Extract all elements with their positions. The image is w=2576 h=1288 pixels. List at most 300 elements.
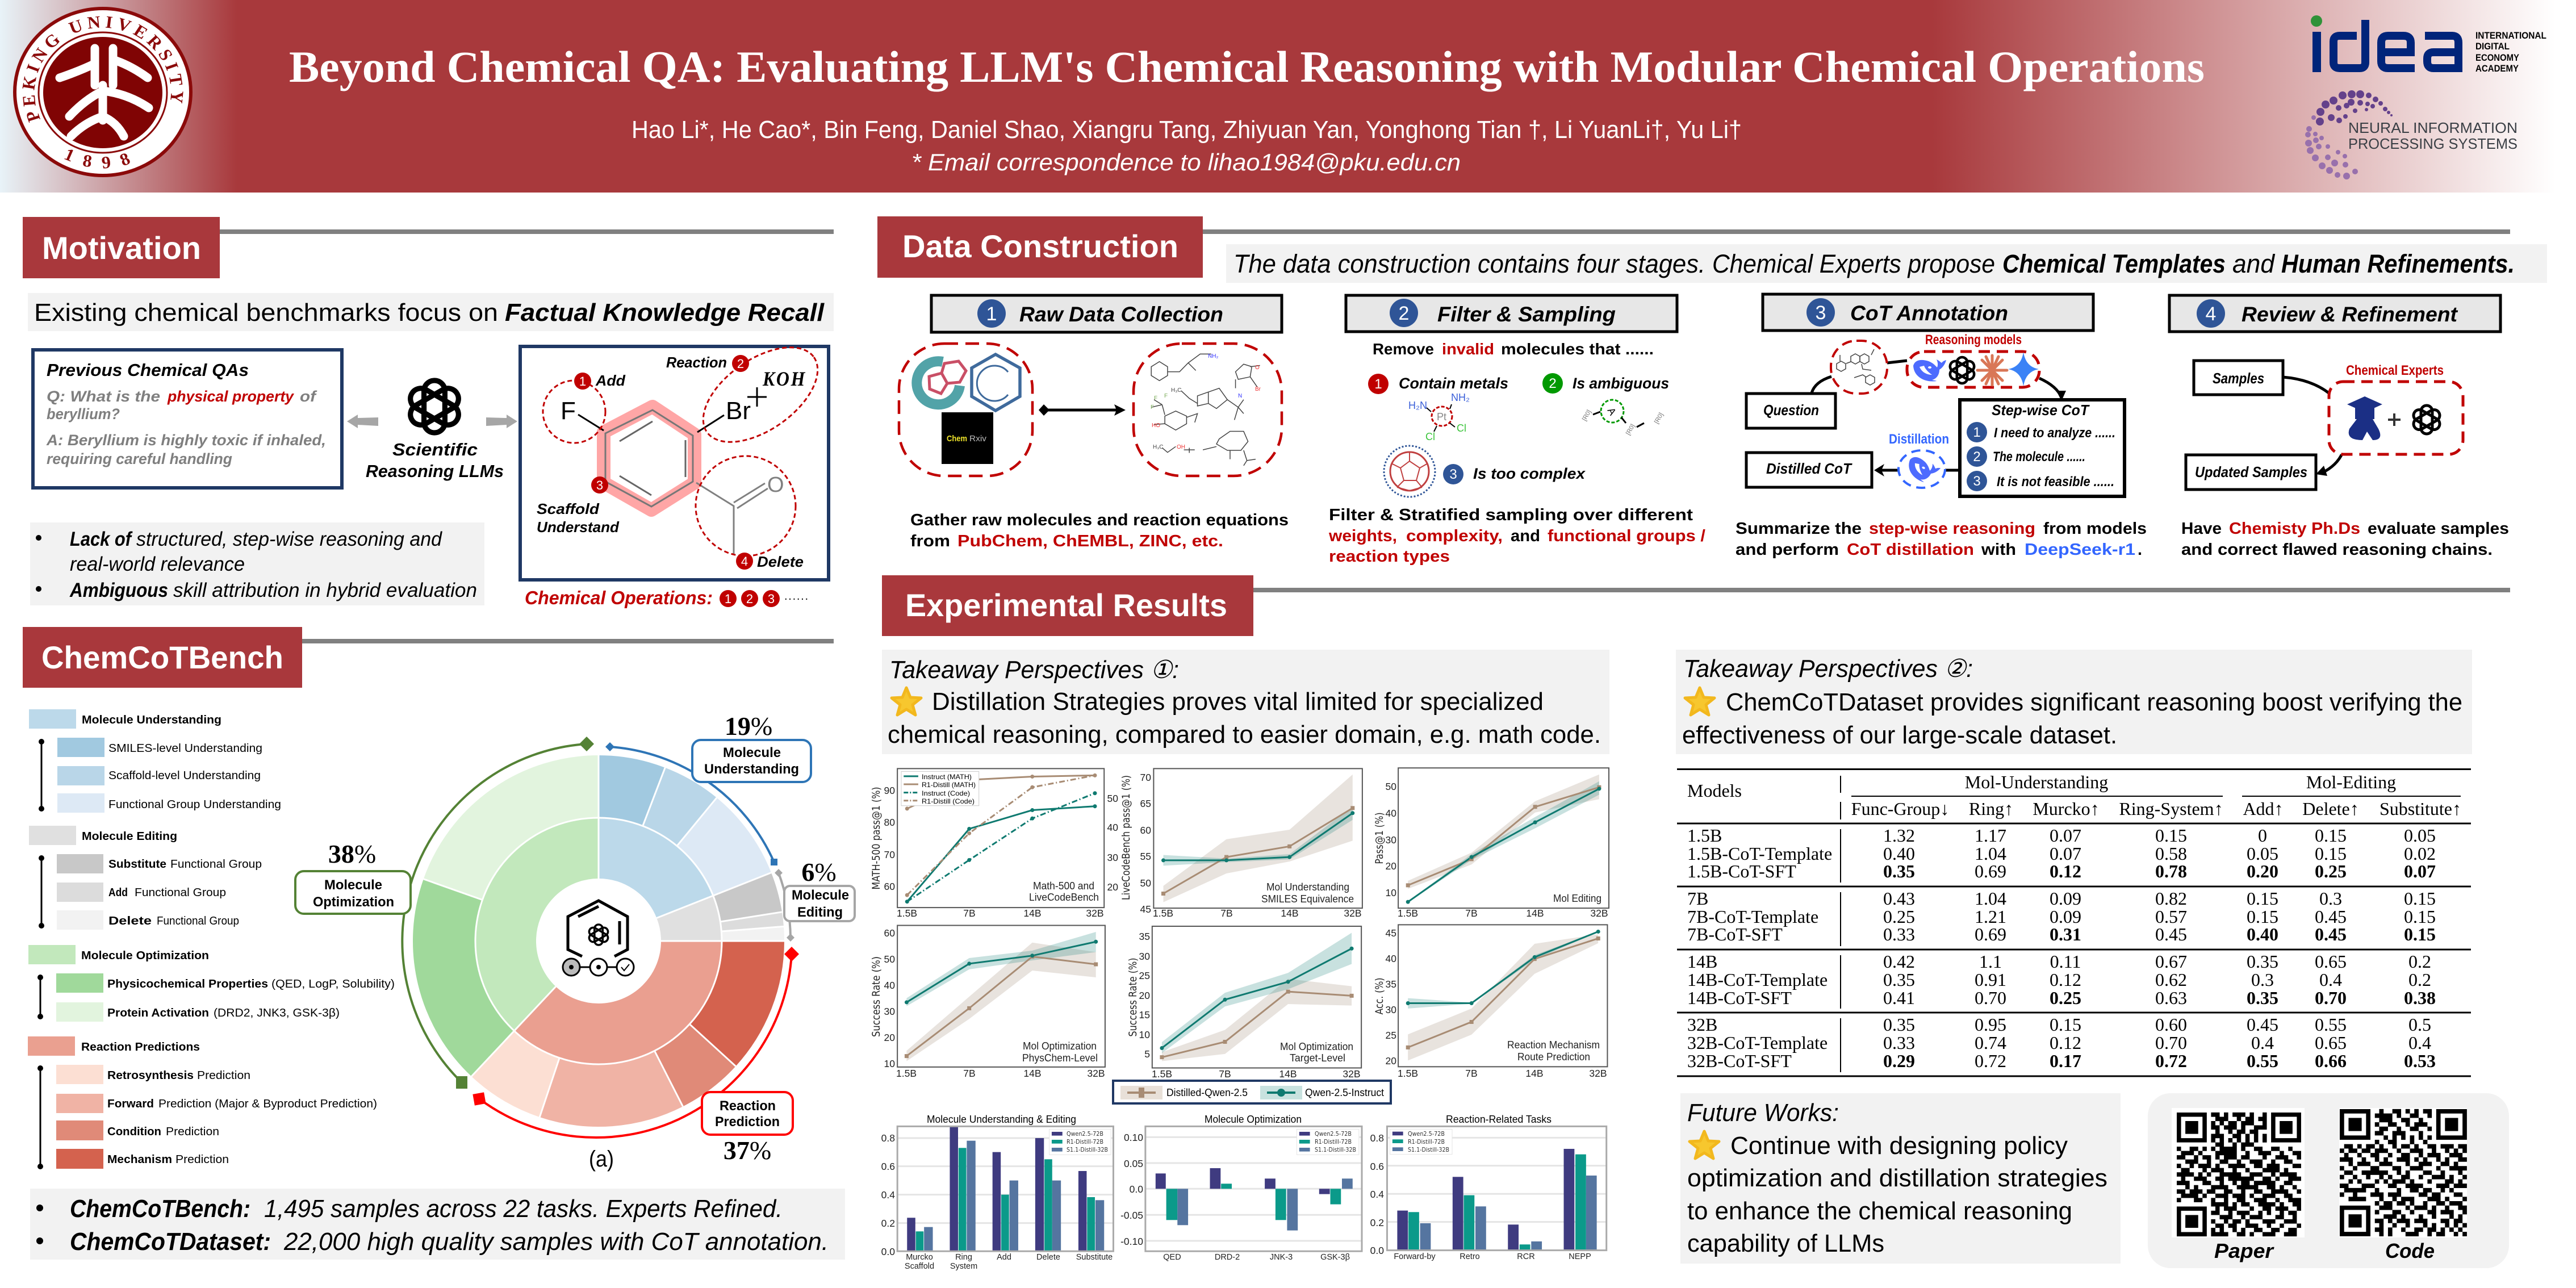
stage 3 heading: 3	[1816, 302, 1826, 324]
logo: NeurIPS: NEURAL INFORMATION	[2348, 119, 2518, 136]
chemical operations caption: 1	[725, 592, 731, 606]
box: chemical operations molecule	[520, 328, 834, 580]
description bar	[1226, 244, 2547, 283]
chart: Mol Optimization PhysChem-Level: 1.5B	[896, 1068, 917, 1079]
heading: ChemCoTBench	[23, 627, 302, 688]
bar chart: Molecule Optimization: 0.0	[1130, 1184, 1143, 1195]
table: model results: 0.70	[2155, 1032, 2187, 1053]
legend: task taxonomy: Prediction	[197, 1069, 250, 1082]
label: Molecule Understanding 19%: Understanding	[704, 762, 799, 777]
label: Molecule Editing 6%: 6%	[801, 858, 837, 886]
chart: Mol Optimization PhysChem-Level: 20	[884, 1032, 895, 1043]
description bar: and	[2232, 249, 2276, 278]
bar chart: Reaction-Related Tasks	[1370, 1114, 1607, 1261]
table: model results: 0.45	[2315, 906, 2347, 927]
stage 2 description: reaction types	[1329, 547, 1450, 566]
box: samples	[2194, 361, 2283, 395]
box: samples: Samples	[2213, 370, 2264, 387]
chart: Mol Understanding SMILES Equivalence: 45	[1140, 904, 1151, 915]
table: model results: 0.25	[2315, 861, 2347, 881]
chemical operations caption: 3	[768, 592, 775, 606]
table: model results: 0.15	[2050, 1014, 2081, 1035]
legend: task taxonomy: (QED, LogP, Solubility)	[271, 977, 395, 990]
table: model results: 0.29	[1883, 1051, 1915, 1071]
chart: Math-500 and LiveCodeBench: 20	[1107, 881, 1118, 893]
header banner	[0, 0, 2546, 193]
stage 1 description	[910, 511, 1289, 550]
table: model results: 0.43	[1883, 888, 1915, 909]
label: Molecule Optimization 38%: Optimization	[313, 894, 394, 910]
stage 3 description: and perform	[1736, 541, 1839, 559]
stage 2 description: complexity,	[1406, 527, 1503, 545]
table: model results: 0.15	[2247, 906, 2278, 927]
icon: center hexagon robot	[563, 901, 634, 976]
chemical experts group: Chemical Experts	[2346, 363, 2444, 378]
chart: Math-500 and LiveCodeBench: Math-500 and	[1033, 880, 1094, 892]
arrow: double headed	[1039, 404, 1126, 416]
chart: Mol Optimization PhysChem-Level: Success Rate (%)	[870, 956, 883, 1037]
chart: Mol Understanding SMILES Equivalence: 65	[1140, 798, 1151, 809]
bar chart: Molecule Optimization	[1120, 1114, 1362, 1262]
invalid criteria: Is too complex	[1473, 465, 1586, 482]
statement bar: Factual Knowledge Recall	[505, 299, 825, 327]
bar chart: Reaction-Related Tasks: 0.4	[1370, 1189, 1384, 1200]
invalid criteria	[1368, 340, 1669, 484]
molecule: platinum complex: Cl	[1457, 423, 1466, 434]
bar chart: Reaction-Related Tasks: 0.2	[1370, 1217, 1384, 1228]
logo: idea: INTERNATIONAL	[2475, 30, 2546, 41]
logo: Peking University seal: PEKING UNIVERSITY	[22, 16, 183, 123]
box: chemical operations molecule: 4	[741, 554, 748, 568]
table: model results: 0.45	[2247, 1014, 2278, 1035]
molecules examples: H₃C	[1153, 444, 1164, 450]
box: previous chemical QAs: requiring careful handling	[47, 450, 232, 467]
legend: task taxonomy: Molecule Understanding	[82, 713, 221, 726]
molecule: platinum complex: Pt	[1437, 411, 1446, 423]
stage 3 heading	[1763, 294, 2093, 331]
table: model results: 0.63	[2155, 988, 2187, 1008]
molecules examples: H₃C	[1171, 387, 1182, 394]
chart: Mol Optimization Target-Level: 30	[1139, 951, 1150, 962]
chart: Math-500 and LiveCodeBench: 1.5B	[897, 908, 917, 919]
table: model results: 0.4	[2408, 1032, 2431, 1053]
table: model results: 0.78	[2155, 861, 2187, 881]
chart: Mol Optimization Target-Level: 14B	[1279, 1068, 1297, 1080]
molecules examples: F	[1151, 404, 1154, 411]
legend: task taxonomy: Protein Activation	[107, 1006, 209, 1019]
chart: Mol Understanding SMILES Equivalence: 7B	[1220, 908, 1233, 919]
table: model results: 0.11	[2050, 951, 2081, 972]
box: step-wise CoT: It is not feasible ......	[1997, 474, 2114, 490]
stage 2 description	[1328, 506, 1705, 566]
chart: Mol Editing: 7B	[1465, 908, 1478, 919]
chart: Math-500 and LiveCodeBench: 32B	[1086, 908, 1104, 919]
icon: reasoning LLM knot with arrows: Scientific	[392, 440, 478, 459]
statement bar	[28, 293, 834, 331]
table: model results: 0.31	[2050, 924, 2081, 944]
legend: task taxonomy	[28, 709, 395, 1169]
bar chart: Molecule Optimization: QED	[1163, 1253, 1181, 1262]
invalid criteria: 3	[1449, 467, 1457, 482]
bullet list: limitations: Ambiguous	[69, 579, 168, 601]
chart: Reaction Mechanism Route Prediction: 25	[1386, 1030, 1396, 1041]
table: model results: 0.38	[2404, 988, 2436, 1008]
chart: Math-500 and LiveCodeBench: Instruct (Code)	[922, 789, 970, 797]
legend: task taxonomy: Prediction	[175, 1153, 229, 1166]
chart: Math-500 and LiveCodeBench: Instruct (MATH)	[922, 773, 972, 781]
legend: task taxonomy: Functional Group	[170, 858, 262, 871]
table: model results: 0.15	[2315, 825, 2347, 846]
table: model results: 14B-CoT-SFT	[1687, 988, 1792, 1008]
chart: Mol Optimization Target-Level: Success Rate (%)	[1127, 957, 1139, 1037]
database logos: Chem	[947, 434, 967, 444]
box: previous chemical QAs: physical property	[167, 388, 295, 405]
chart: Reaction Mechanism Route Prediction: 32B	[1589, 1068, 1607, 1079]
table: model results: 0.17	[2050, 1051, 2081, 1071]
box: chemical operations molecule: F	[561, 397, 576, 425]
chart: Reaction Mechanism Route Prediction: 1.5B	[1398, 1068, 1418, 1079]
box: updated samples: Updated Samples	[2195, 463, 2307, 480]
molecules examples	[1134, 344, 1282, 476]
bullet list: limitations	[30, 522, 484, 605]
stage 3 heading: CoT Annotation	[1850, 302, 2008, 325]
table: model results: 32B-CoT-SFT	[1687, 1051, 1792, 1071]
chart: Mol Editing: Mol Editing	[1553, 893, 1601, 904]
box: question: Question	[1763, 402, 1819, 419]
bar chart: Molecule Optimization: JNK-3	[1270, 1253, 1293, 1262]
bar chart: Molecule Optimization: -0.10	[1120, 1236, 1143, 1247]
table: model results: 0.15	[2155, 825, 2187, 846]
legend: task taxonomy: Functional Group	[135, 886, 226, 899]
chart: Mol Optimization PhysChem-Level	[870, 925, 1105, 1079]
chart: Mol Optimization PhysChem-Level: PhysChem-Level	[1022, 1052, 1098, 1064]
chart: Mol Editing: Pass@1 (%)	[1373, 812, 1386, 864]
chart: Math-500 and LiveCodeBench: R1-Distill (MATH)	[922, 781, 976, 789]
stage 4 description	[2181, 520, 2509, 559]
table: model results: 0.65	[2315, 1032, 2347, 1053]
chart: Mol Optimization Target-Level: Mol Optimization	[1280, 1041, 1353, 1052]
table: model results: 14B	[1687, 951, 1717, 972]
statement bar: Existing chemical benchmarks focus on	[34, 299, 498, 327]
table: model results: 7B	[1687, 888, 1708, 909]
QR code: paper: Paper	[2214, 1239, 2274, 1262]
chart: Math-500 and LiveCodeBench: 90	[884, 785, 895, 796]
table: model results: 1.5B-CoT-Template	[1687, 843, 1832, 864]
bar chart: Molecule Understanding and Editing: Delete	[1036, 1253, 1060, 1262]
chart: Math-500 and LiveCodeBench	[870, 768, 1118, 919]
chart: Mol Understanding SMILES Equivalence: 14B	[1281, 908, 1299, 919]
bar chart: Molecule Understanding and Editing: 0.4	[881, 1189, 895, 1201]
box: chemical operations molecule: Delete	[757, 553, 804, 570]
takeaway 2: Takeaway Perspectives ②:	[1683, 655, 1973, 683]
table: model results: 0.09	[2050, 906, 2081, 927]
table: model results: 0.15	[2404, 888, 2436, 909]
box: step-wise CoT: 2	[1973, 449, 1981, 465]
chart: Mol Editing: 32B	[1590, 908, 1608, 919]
description bar: The data construction contains four stages.	[1233, 249, 1705, 278]
box: previous chemical QAs: Q: What is the	[47, 388, 160, 405]
stage 2 description: Filter & Stratified sampling over different	[1329, 506, 1693, 524]
table: model results: 0.65	[2315, 951, 2347, 972]
bar chart: Molecule Understanding and Editing: 0.8	[881, 1132, 895, 1144]
chart: Mol Optimization Target-Level: 20	[1139, 990, 1150, 1001]
table: model results: 1.5B	[1687, 825, 1722, 846]
molecule: platinum complex: NH₂	[1451, 392, 1470, 403]
logo: idea: ECONOMY	[2475, 52, 2520, 63]
bar chart: Molecule Optimization: -0.05	[1120, 1210, 1143, 1221]
stage 3 description: DeepSeek-r1	[2025, 541, 2135, 559]
reasoning models group	[1907, 332, 2039, 387]
molecule: platinum complex: Cl	[1425, 431, 1435, 442]
takeaway 1: Distillation Strategies proves vital limited for specialized	[932, 688, 1544, 716]
chart: Mol Understanding SMILES Equivalence: Mol Understanding	[1266, 881, 1349, 893]
QR code: paper	[2172, 1108, 2305, 1262]
bullet list: dataset stats: 22,000 high quality samples with CoT annotation.	[283, 1228, 829, 1256]
bullet list: dataset stats: ChemCoTBench:	[70, 1195, 250, 1223]
table: model results: 0.35	[1883, 969, 1915, 990]
table: model results: Substitute↑	[2380, 798, 2461, 819]
stage 2 heading: Filter & Sampling	[1437, 303, 1616, 326]
chemical operations caption: 2	[746, 592, 753, 606]
molecules examples: O	[1255, 365, 1260, 371]
heading: Data Construction	[877, 216, 1203, 278]
authors: Hao Li*, He Cao*, Bin Feng, Daniel Shao, Xiangru Tang, Zhiyuan Yan, Yonghong Tian †, Li YuanLi†, Yu Li†	[632, 116, 1742, 144]
chart: Mol Optimization PhysChem-Level: 60	[884, 927, 895, 939]
stage 4 description: Have	[2181, 520, 2222, 538]
box: step-wise CoT: I need to analyze ......	[1994, 425, 2115, 441]
icon: reasoning LLM knot with arrows	[347, 380, 517, 481]
table: model results: 0.07	[2050, 825, 2081, 846]
table: model results: 1.32	[1883, 825, 1915, 846]
bar chart: Molecule Optimization: 0.10	[1124, 1132, 1143, 1143]
table: model results: 0.2	[2408, 951, 2431, 972]
chart: Math-500 and LiveCodeBench: 7B	[963, 908, 976, 919]
stage 3 description: with	[1981, 541, 2016, 559]
table: model results: 0.53	[2404, 1051, 2436, 1071]
chart: Mol Understanding SMILES Equivalence: LiveCodeBench pass@1 (%)	[1120, 775, 1132, 900]
molecule: ambiguous R groups: [R0]	[1581, 409, 1593, 422]
table: model results: 0.33	[1883, 924, 1915, 944]
bar chart: Reaction-Related Tasks: Retro	[1460, 1252, 1480, 1261]
molecule: ambiguous R groups: [R0]	[1625, 423, 1637, 436]
bar chart: Molecule Understanding and Editing: Qwen2.5-72B	[1067, 1130, 1103, 1138]
bar chart: Molecule Understanding and Editing: R1-Distill-72B	[1067, 1138, 1103, 1145]
bar chart: Molecule Understanding and Editing: 0.0	[881, 1246, 895, 1257]
chart: Mol Optimization Target-Level: 7B	[1219, 1068, 1231, 1080]
legend: task taxonomy: SMILES-level Understanding	[108, 742, 262, 755]
table: model results: 0	[2258, 825, 2267, 846]
stage 2 heading	[1346, 295, 1677, 332]
chart: Mol Optimization PhysChem-Level: 10	[884, 1058, 895, 1069]
box: previous chemical QAs: A: Beryllium is highly toxic if inhaled,	[46, 432, 326, 449]
bar chart: Molecule Understanding and Editing: System	[950, 1262, 977, 1271]
bullet list: limitations: real-world relevance	[70, 553, 245, 575]
distillation icon	[1889, 432, 1949, 488]
table: model results: 7B-CoT-Template	[1687, 906, 1818, 927]
legend: task taxonomy: Retrosynthesis	[107, 1069, 194, 1082]
legend: task taxonomy: Reaction Predictions	[81, 1040, 200, 1053]
connectors	[2283, 377, 2343, 476]
description bar: Human Refinements.	[2281, 249, 2515, 278]
stage 1 description: from	[910, 532, 950, 550]
chart: Reaction Mechanism Route Prediction: Route Prediction	[1517, 1051, 1590, 1063]
bullet list: dataset stats: ChemCoTDataset:	[70, 1228, 271, 1256]
legend: task taxonomy: Functional Group Understanding	[108, 798, 281, 811]
panel: data construction	[877, 216, 2547, 566]
heading: Motivation: Motivation	[42, 230, 201, 266]
table: model results: 0.07	[2050, 843, 2081, 864]
takeaway 1	[882, 650, 1609, 754]
distillation icon: Distillation	[1889, 432, 1949, 447]
future works: capability of LLMs	[1687, 1230, 1884, 1257]
box: chemical operations molecule: 1	[579, 374, 586, 388]
takeaway 1: Takeaway Perspectives ①:	[889, 656, 1179, 684]
invalid criteria: Remove	[1373, 340, 1434, 358]
molecule: ambiguous R groups: A	[1605, 405, 1619, 417]
chart: Mol Optimization PhysChem-Level: 7B	[963, 1068, 976, 1079]
legend: task taxonomy: Molecule Editing	[82, 830, 177, 843]
logo: idea: ACADEMY	[2475, 63, 2519, 74]
table: model results: 0.60	[2155, 1014, 2187, 1035]
logo: idea	[2311, 15, 2546, 74]
label: Molecule Understanding 19%: 19%	[725, 712, 772, 741]
chart: Mol Editing	[1373, 768, 1609, 919]
table: model results: 0.35	[1883, 1014, 1915, 1035]
label: Molecule Optimization 38%: 38%	[328, 839, 376, 868]
chart: Reaction Mechanism Route Prediction: 40	[1386, 953, 1396, 964]
table: model results: 1.17	[1975, 825, 2006, 846]
bar chart: Reaction-Related Tasks: Forward-by	[1394, 1252, 1436, 1261]
takeaway 2: ChemCoTDataset provides significant reasoning boost verifying the	[1726, 688, 2462, 716]
takeaway 2: effectiveness of our large-scale dataset.	[1682, 721, 2117, 749]
stage 4 description: and correct flawed reasoning chains.	[2181, 541, 2493, 559]
molecules examples: HO	[1152, 423, 1160, 429]
legend: task taxonomy: Add	[108, 886, 128, 899]
stage 2 heading: 2	[1399, 303, 1409, 324]
legend: task taxonomy: Substitute	[108, 858, 166, 871]
chart: Reaction Mechanism Route Prediction: Reaction Mechanism	[1507, 1039, 1600, 1051]
chart: Math-500 and LiveCodeBench: 80	[884, 817, 895, 828]
bar chart: Reaction-Related Tasks: 0.0	[1370, 1245, 1384, 1256]
chart: Reaction Mechanism Route Prediction: 35	[1386, 978, 1396, 990]
future works: Continue with designing policy	[1730, 1132, 2068, 1160]
chart: Mol Optimization Target-Level	[1127, 926, 1361, 1080]
box: step-wise CoT: 1	[1973, 425, 1981, 440]
chemical operations caption: Chemical Operations:	[525, 587, 713, 608]
table: model results: 0.45	[2315, 924, 2347, 944]
chemical operations caption: ......	[784, 590, 808, 603]
legend: task taxonomy: Mechanism	[107, 1153, 172, 1166]
table: model results: Mol-Understanding	[1965, 772, 2108, 792]
chart: sunburst donut of task distribution	[295, 712, 855, 1172]
caption (a): (a)	[589, 1147, 614, 1172]
logo: NeurIPS	[2305, 90, 2518, 179]
chemical operations caption	[525, 587, 808, 608]
molecules examples: N	[1238, 393, 1242, 399]
box: chemical operations molecule: 3	[596, 478, 603, 492]
chart: Mol Editing: 30	[1386, 834, 1396, 846]
label: Reaction Prediction 37%: 37%	[724, 1136, 771, 1165]
chart: Math-500 and LiveCodeBench: R1-Distill (Code)	[922, 797, 975, 805]
stage 4 heading: Review & Refinement	[2242, 303, 2458, 326]
chart: Mol Optimization PhysChem-Level: 50	[884, 954, 895, 965]
table: model results: 0.12	[2050, 969, 2081, 990]
table: model results: 32B-CoT-Template	[1687, 1032, 1828, 1053]
table: model results: 0.05	[2247, 843, 2278, 864]
legend: task taxonomy: Prediction	[166, 1125, 219, 1138]
table: model results	[1677, 769, 2471, 1076]
heading: Experimental Results	[882, 575, 1253, 636]
stage 3 description: Summarize the	[1736, 520, 1862, 538]
chart: Mol Understanding SMILES Equivalence: 70	[1140, 772, 1151, 783]
box: previous chemical QAs: Previous Chemical QAs	[47, 360, 249, 380]
table: model results: 0.15	[2315, 843, 2347, 864]
bar chart: Reaction-Related Tasks: Qwen2.5-72B	[1408, 1130, 1445, 1138]
table: model results: 0.35	[2247, 988, 2278, 1008]
table: model results: 0.12	[2050, 1032, 2081, 1053]
heading: Motivation	[23, 217, 220, 278]
table: model results: 0.3	[2319, 888, 2342, 909]
table: model results: 0.91	[1975, 969, 2006, 990]
stage 1 heading	[931, 295, 1282, 332]
table: model results: 1.21	[1975, 906, 2006, 927]
table: model results: 0.15	[2404, 906, 2436, 927]
legend: task taxonomy: Scaffold-level Understanding	[108, 769, 261, 782]
box: step-wise CoT	[1960, 400, 2125, 496]
molecules examples: F	[1164, 393, 1168, 399]
table: model results: 0.35	[1883, 861, 1915, 881]
box: chemical operations molecule: Scaffold	[537, 500, 600, 517]
email: * Email correspondence to lihao1984@pku.edu.cn	[911, 149, 1461, 175]
chart: Mol Optimization Target-Level: 15	[1139, 1009, 1150, 1021]
chart: Math-500 and LiveCodeBench: 50	[1107, 793, 1118, 804]
table: model results: 0.33	[1883, 1032, 1915, 1053]
table: model results: Mol-Editing	[2306, 772, 2396, 792]
legend: task taxonomy: Functional Group	[157, 914, 239, 927]
logo: NeurIPS: PROCESSING SYSTEMS	[2348, 135, 2518, 152]
label: Reaction Prediction 37%	[702, 1092, 793, 1165]
table: model results: 14B-CoT-Template	[1687, 969, 1828, 990]
chart: Mol Editing: 20	[1386, 860, 1396, 872]
chart: Reaction Mechanism Route Prediction: 30	[1386, 1004, 1396, 1015]
stage 2: filter and sampling	[1328, 295, 1705, 566]
chart: Mol Understanding SMILES Equivalence: 60	[1140, 825, 1151, 836]
molecules examples: Br	[1255, 386, 1261, 392]
stage 1 heading: Raw Data Collection	[1019, 303, 1223, 326]
box: previous chemical QAs: beryllium?	[47, 405, 120, 423]
chart: Mol Editing: 14B	[1526, 908, 1544, 919]
chart: Mol Optimization PhysChem-Level: 32B	[1087, 1068, 1105, 1079]
table: model results: 0.4	[2319, 969, 2342, 990]
label: Molecule Understanding 19%	[692, 712, 811, 782]
label: Molecule Editing 6%: Editing	[797, 905, 843, 920]
table: model results: 0.4	[2251, 1032, 2274, 1053]
title: Beyond Chemical QA: Evaluating LLM's Chemical Reasoning with Modular Chemical Operations	[289, 42, 2205, 91]
table: model results: 0.35	[2247, 951, 2278, 972]
bar chart: Molecule Understanding and Editing: 0.2	[881, 1218, 895, 1229]
chart: Mol Editing: 10	[1386, 887, 1396, 898]
table: model results: 0.05	[2404, 825, 2436, 846]
table: model results: 0.3	[2251, 969, 2274, 990]
stage 4 description: Chemisty Ph.Ds	[2229, 520, 2360, 538]
box: step-wise CoT: 3	[1973, 474, 1981, 489]
box: updated samples	[2186, 455, 2316, 490]
table: model results: 0.70	[1975, 988, 2006, 1008]
legend: task taxonomy: Delete	[108, 914, 152, 927]
invalid criteria: Is ambiguous	[1573, 375, 1669, 392]
chart: Mol Understanding SMILES Equivalence: 32B	[1344, 908, 1362, 919]
heading: ChemCoTBench: ChemCoTBench	[41, 639, 283, 675]
